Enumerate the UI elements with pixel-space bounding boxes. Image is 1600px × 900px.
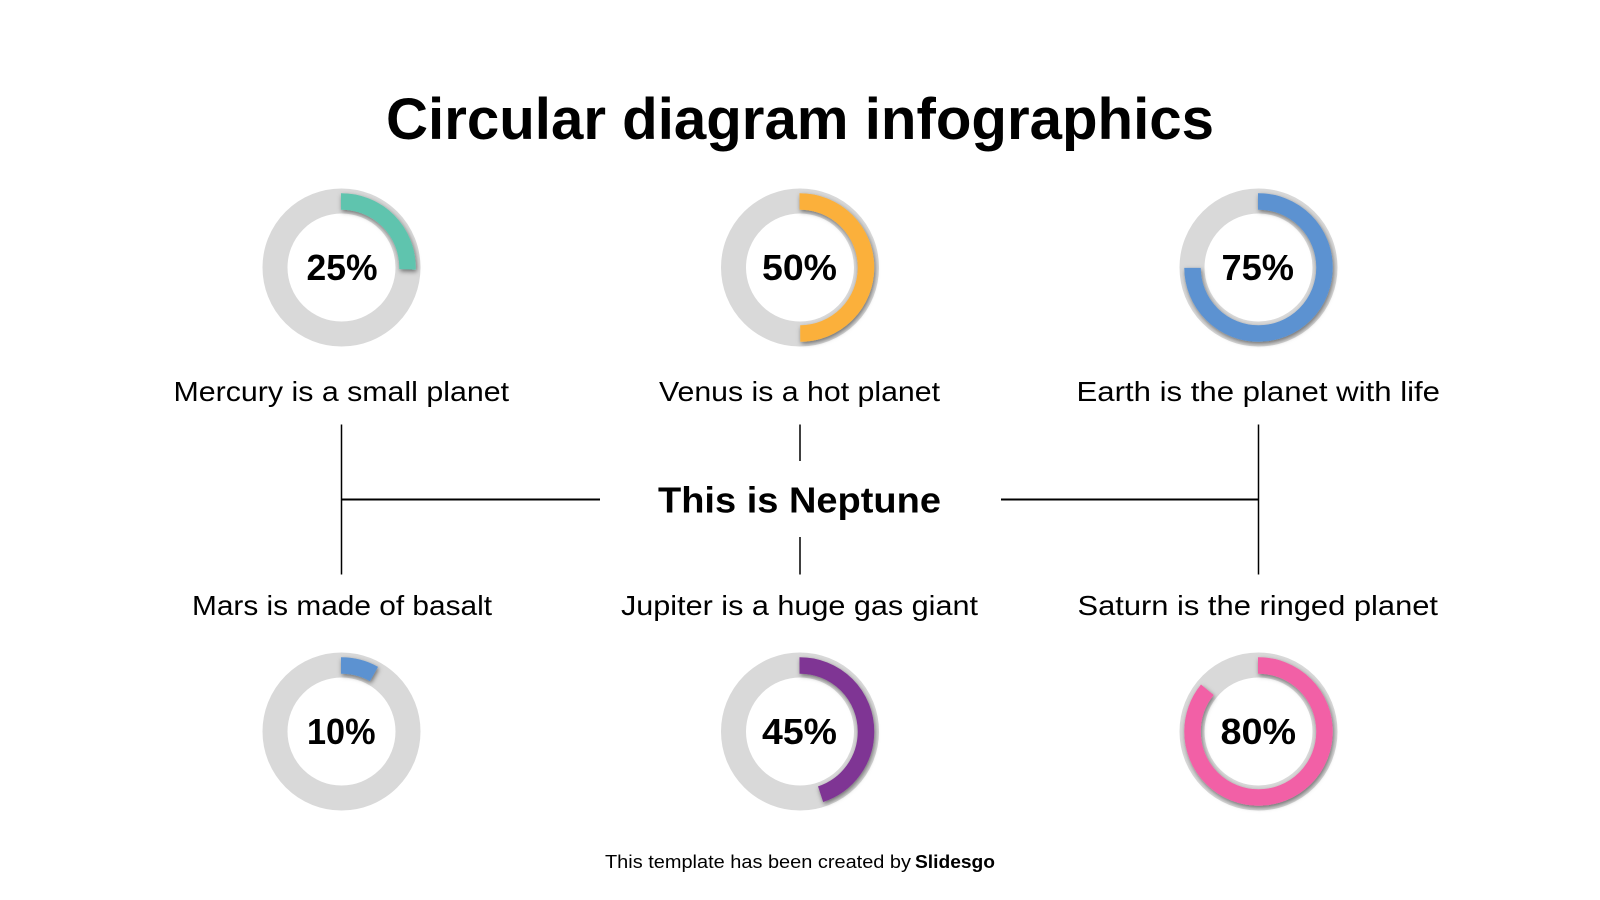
center heading: This is Neptune xyxy=(658,480,941,520)
footer credit: Slidesgo xyxy=(915,852,995,872)
connector lines xyxy=(342,424,1258,574)
donut: Earth 75%: 75% xyxy=(1222,247,1294,288)
label: Venus: Venus is a hot planet xyxy=(659,376,940,407)
label: Mercury: Mercury is a small planet xyxy=(174,376,509,407)
donut: Mars 10% xyxy=(275,665,408,798)
donut: Saturn 80% xyxy=(1192,665,1325,798)
donut: Venus 50%: 50% xyxy=(762,247,837,288)
donut: Jupiter 45% xyxy=(734,665,866,798)
donut: Earth 75% xyxy=(1192,201,1325,334)
donut: Mars 10%: 10% xyxy=(307,711,376,752)
title: Circular diagram infographics xyxy=(386,87,1214,152)
label: Jupiter: Jupiter is a huge gas giant xyxy=(621,590,978,621)
label: Mars: Mars is made of basalt xyxy=(192,590,492,621)
donut: Saturn 80%: 80% xyxy=(1220,711,1296,752)
label: Saturn: Saturn is the ringed planet xyxy=(1078,590,1438,621)
footer credit: This template has been created by xyxy=(605,852,911,872)
donut: Jupiter 45%: 45% xyxy=(762,711,837,752)
donut: Mercury 25% xyxy=(275,201,408,334)
donut: Venus 50% xyxy=(734,201,866,334)
donut: Mercury 25%: 25% xyxy=(306,247,378,288)
label: Earth: Earth is the planet with life xyxy=(1076,376,1440,407)
